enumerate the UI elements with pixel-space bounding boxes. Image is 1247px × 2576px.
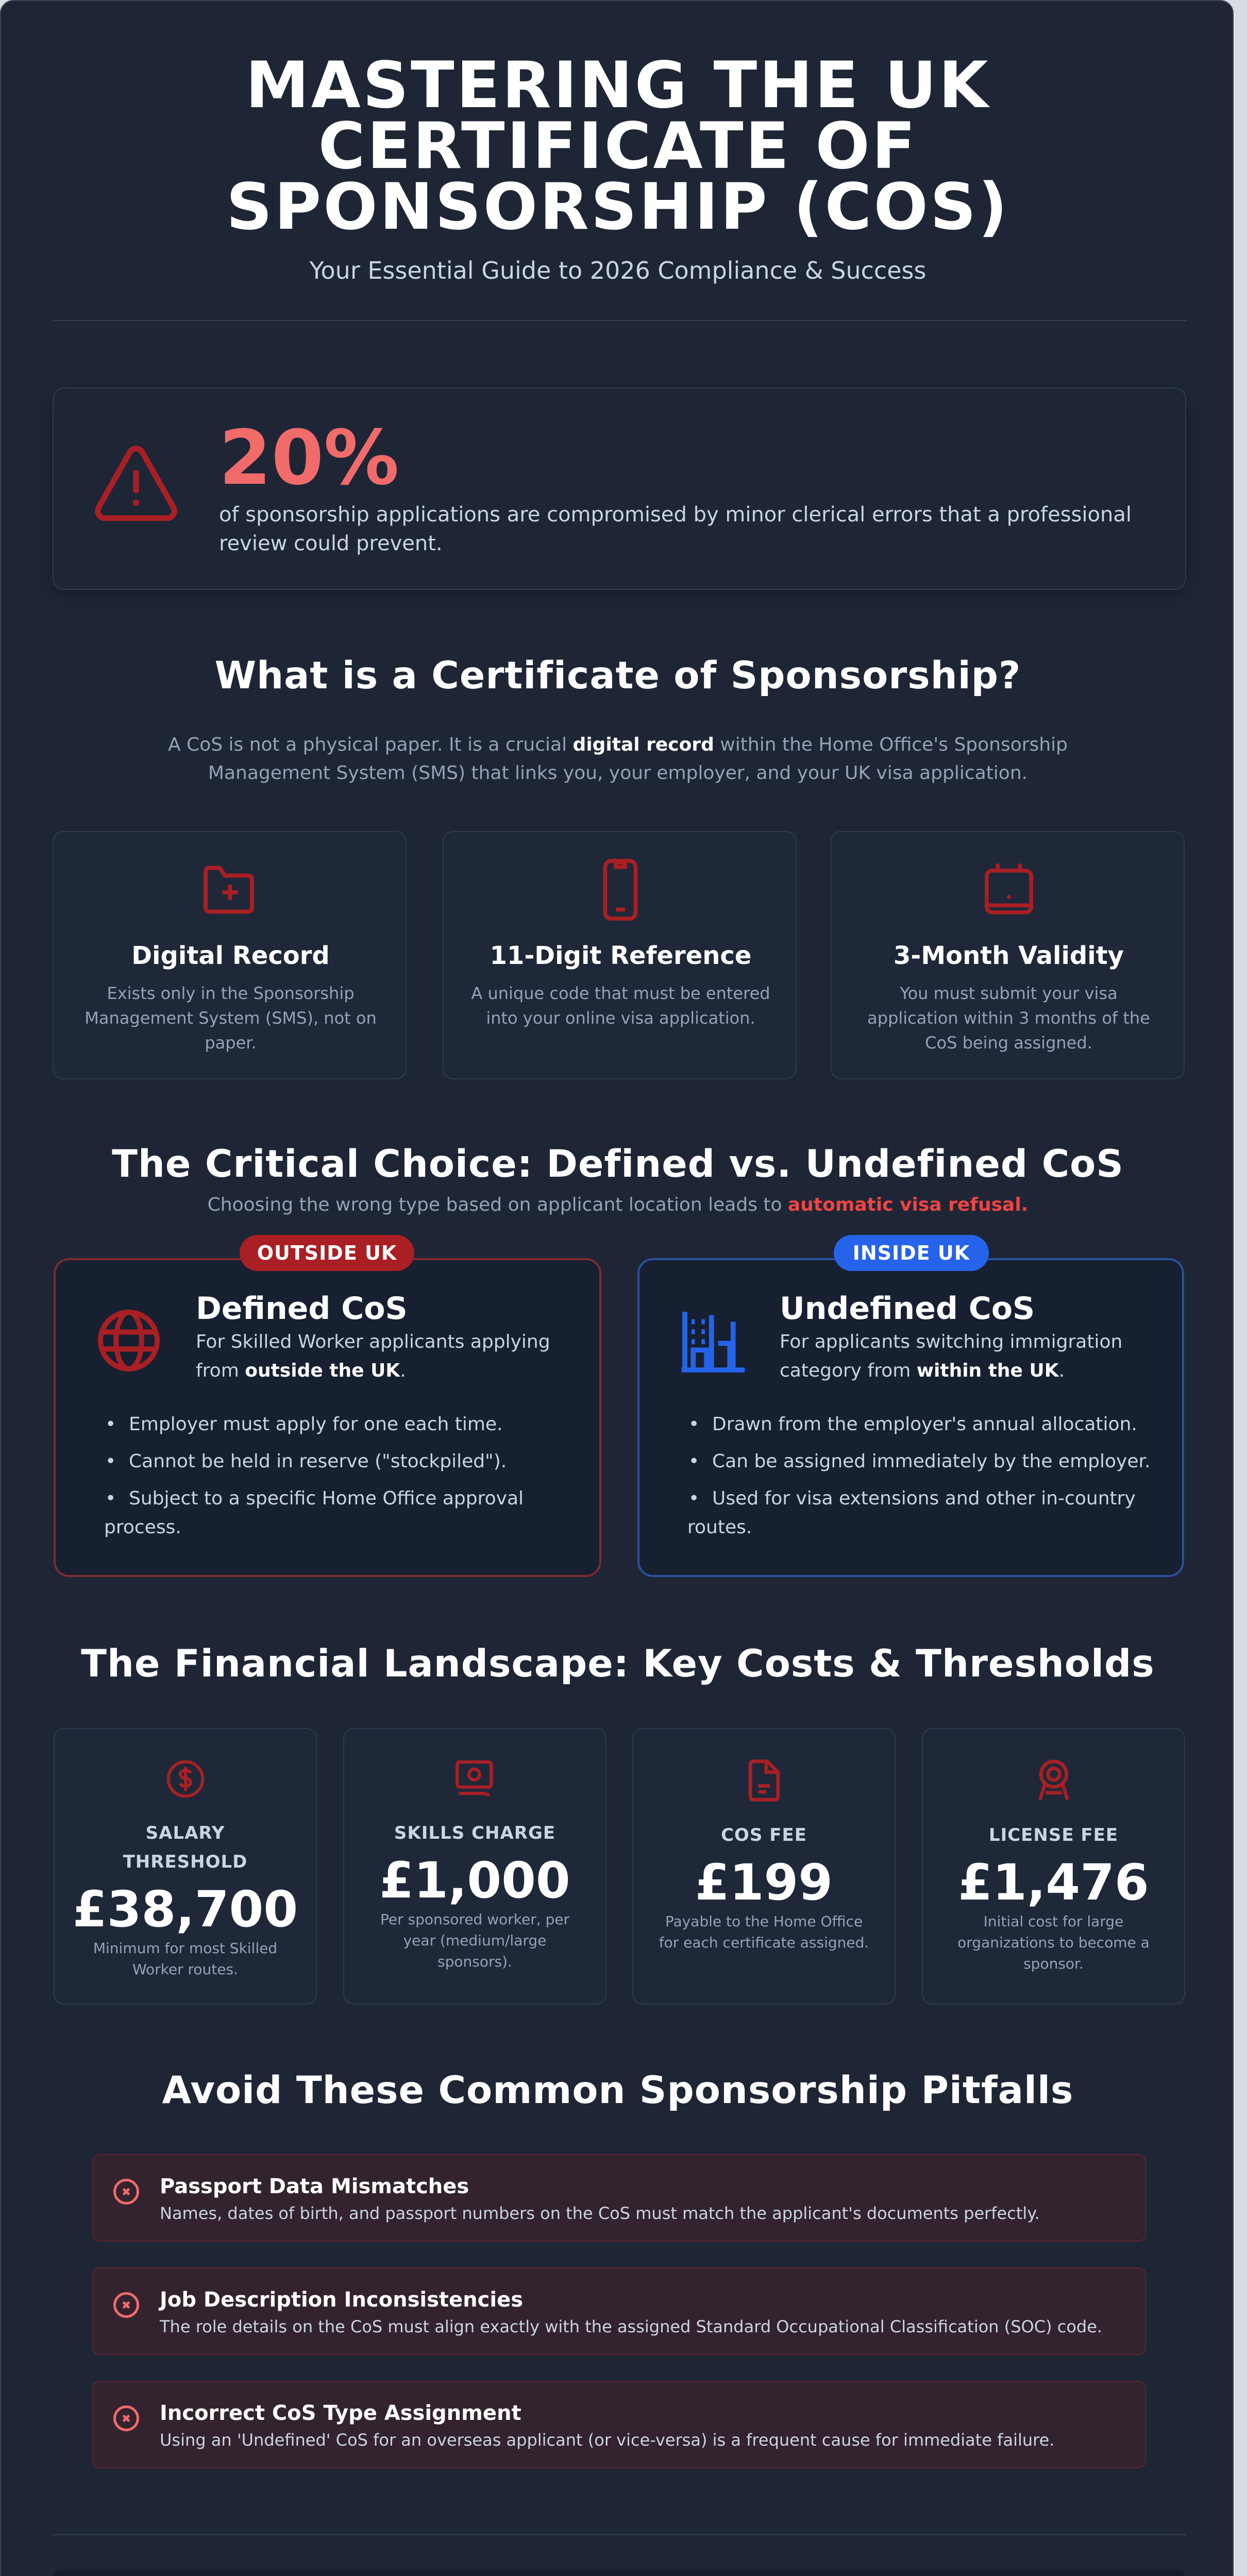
title: CERTIFICATE OF xyxy=(318,109,918,183)
pitfall: job description xyxy=(92,2267,1146,2355)
card text: Management System (SMS), not on xyxy=(85,1008,377,1028)
card: 3-month validity xyxy=(831,831,1185,1079)
panel subtitle: from outside the UK. xyxy=(196,1360,406,1381)
card title: Digital Record xyxy=(131,941,330,970)
pitfall: passport xyxy=(92,2154,1146,2242)
bullet list: process. xyxy=(104,1517,181,1538)
intro paragraph xyxy=(168,734,1068,784)
cost card: CoS fee: Payable to the Home Office xyxy=(665,1913,863,1930)
cost card: salary threshold xyxy=(54,1728,317,2005)
stat callout xyxy=(53,387,1186,590)
bullet list: Cannot be held in reserve ("stockpiled"). xyxy=(129,1451,507,1472)
card text: A unique code that must be entered xyxy=(471,984,770,1003)
heading: critical choice: The Critical Choice: Defined vs. Undefined CoS xyxy=(112,1142,1124,1186)
pitfall: job description: The role details on the CoS must align exactly with the assigned Standard Occupational Classification (SOC) code. xyxy=(160,2317,1102,2336)
subtitle: Your Essential Guide to 2026 Compliance & Success xyxy=(310,257,926,284)
cost card: CoS fee: COS FEE xyxy=(721,1825,807,1845)
panel: defined CoS xyxy=(54,1258,601,1577)
cost card: CoS fee: £199 xyxy=(695,1854,833,1911)
pitfall: incorrect type xyxy=(92,2381,1146,2468)
card title: 3-Month Validity xyxy=(894,941,1124,970)
bullet list: Employer must apply for one each time. xyxy=(129,1414,503,1435)
card: 11-digit reference xyxy=(443,831,797,1079)
pitfall: passport: Passport Data Mismatches xyxy=(160,2175,469,2198)
stat text xyxy=(219,503,1132,555)
bullet list: • xyxy=(105,1451,116,1472)
cost card: salary threshold: Worker routes. xyxy=(132,1961,238,1978)
bullet list: • xyxy=(688,1414,699,1435)
card text: application within 3 months of the xyxy=(867,1008,1150,1028)
badge: outside UK: OUTSIDE UK xyxy=(257,1242,397,1264)
cost card: salary threshold: THRESHOLD xyxy=(123,1852,247,1872)
panel subtitle: category from within the UK. xyxy=(780,1360,1065,1381)
title: SPONSORSHIP (COS) xyxy=(226,170,1009,244)
heading: what is a CoS: What is a Certificate of Sponsorship? xyxy=(215,654,1021,698)
cost card: license fee: £1,476 xyxy=(958,1854,1149,1911)
badge: inside UK xyxy=(834,1235,989,1271)
stat number: 20% xyxy=(219,414,399,502)
card text: CoS being assigned. xyxy=(925,1033,1092,1053)
stat text: of sponsorship applications are compromised by minor clerical errors that a professional xyxy=(219,503,1132,527)
cost card: salary threshold: SALARY xyxy=(146,1823,225,1843)
icon: money xyxy=(456,1760,493,1797)
icon: x circle xyxy=(113,2179,139,2205)
bullet list: routes. xyxy=(687,1517,752,1538)
card text xyxy=(85,984,377,1053)
title xyxy=(226,48,1009,244)
card text: paper. xyxy=(205,1033,257,1053)
card: digital record xyxy=(53,831,407,1079)
card text xyxy=(471,984,770,1028)
cost card: license fee xyxy=(922,1728,1185,2005)
icon: award xyxy=(1038,1760,1069,1800)
card text: Exists only in the Sponsorship xyxy=(107,984,355,1003)
cost card: skills charge: £1,000 xyxy=(379,1852,570,1909)
subheading: Choosing the wrong type based on applicant location leads to automatic visa refusal. xyxy=(208,1194,1028,1215)
icon: dollar xyxy=(167,1760,204,1798)
bullet list: • xyxy=(105,1414,116,1435)
icon: building xyxy=(681,1312,745,1372)
card text: You must submit your visa xyxy=(900,984,1118,1003)
bullet list: • xyxy=(688,1488,699,1509)
cost card: license fee: Initial cost for large xyxy=(984,1913,1123,1930)
heading: financial landscape: The Financial Landscape: Key Costs & Thresholds xyxy=(81,1642,1155,1686)
icon: phone xyxy=(603,859,638,921)
card text xyxy=(867,984,1150,1053)
bullet list: • xyxy=(105,1488,116,1509)
bullet list xyxy=(687,1414,1150,1538)
pitfall: incorrect type: Incorrect CoS Type Assignment xyxy=(160,2401,521,2425)
panel: undefined CoS xyxy=(637,1258,1184,1577)
footer xyxy=(54,2569,1185,2576)
heading: pitfalls: Avoid These Common Sponsorship Pitfalls xyxy=(162,2069,1073,2112)
panel title: Undefined CoS xyxy=(780,1291,1035,1327)
card title: 11-Digit Reference xyxy=(490,941,751,970)
intro paragraph: A CoS is not a physical paper. It is a crucial digital record within the Home Office's Sponsorship xyxy=(168,734,1068,755)
bullet list: Used for visa extensions and other in-country xyxy=(712,1488,1136,1509)
icon: x circle xyxy=(113,2405,139,2431)
cost card: salary threshold: £38,700 xyxy=(73,1880,298,1938)
icon: globe xyxy=(98,1310,160,1371)
cost card: skills charge: Per sponsored worker, per xyxy=(380,1911,569,1928)
cost card: skills charge: sponsors). xyxy=(437,1953,512,1970)
icon: document xyxy=(748,1759,780,1802)
cost card: license fee: organizations to become a xyxy=(957,1934,1150,1951)
pitfall: passport: Names, dates of birth, and passport numbers on the CoS must match the applicant's documents perfectly. xyxy=(160,2204,1040,2223)
cost card: CoS fee xyxy=(632,1728,896,2005)
cost card: salary threshold: Minimum for most Skilled xyxy=(93,1940,277,1957)
icon: folder xyxy=(204,866,254,914)
pitfall: job description: Job Description Inconsistencies xyxy=(160,2288,523,2312)
bullet list: Subject to a specific Home Office approval xyxy=(129,1488,524,1509)
intro paragraph: Management System (SMS) that links you, your employer, and your UK visa application. xyxy=(208,762,1027,784)
panel title: Defined CoS xyxy=(196,1291,408,1327)
bullet list: Can be assigned immediately by the employer. xyxy=(712,1451,1150,1472)
cost card: CoS fee: for each certificate assigned. xyxy=(659,1934,869,1951)
cost card: skills charge: SKILLS CHARGE xyxy=(394,1823,555,1843)
stat text: review could prevent. xyxy=(219,532,443,555)
panel subtitle xyxy=(196,1331,550,1381)
cost card: skills charge xyxy=(343,1728,606,2005)
cost card: skills charge: year (medium/large xyxy=(403,1932,546,1949)
badge: inside UK: INSIDE UK xyxy=(853,1242,970,1264)
pitfall: incorrect type: Using an 'Undefined' CoS for an overseas applicant (or vice-versa) is a frequent cause for immediate failure. xyxy=(160,2430,1054,2450)
card text: into your online visa application. xyxy=(486,1008,755,1028)
panel subtitle: For Skilled Worker applicants applying xyxy=(196,1331,550,1352)
title: MASTERING THE UK xyxy=(245,48,990,123)
icon: x circle xyxy=(113,2292,139,2318)
badge: outside UK xyxy=(240,1235,414,1271)
bullet list: • xyxy=(688,1451,699,1472)
bullet list: Drawn from the employer's annual allocation. xyxy=(712,1414,1137,1435)
cost card: license fee: LICENSE FEE xyxy=(989,1825,1118,1845)
panel subtitle xyxy=(780,1331,1122,1381)
bullet list xyxy=(104,1414,524,1538)
cost card: license fee: sponsor. xyxy=(1023,1955,1084,1972)
icon: calendar xyxy=(985,863,1033,914)
icon: warning xyxy=(95,446,177,521)
panel subtitle: For applicants switching immigration xyxy=(780,1331,1122,1352)
